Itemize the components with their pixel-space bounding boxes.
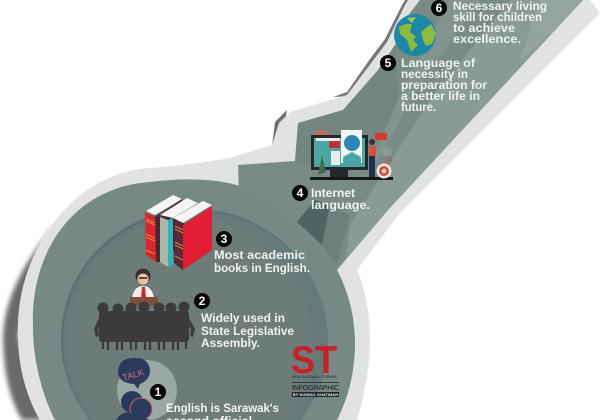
text 6: excellence. — [453, 34, 521, 46]
badge 1: 1 — [155, 385, 162, 399]
badge 2: 2 — [199, 294, 206, 308]
badge 4 — [292, 185, 308, 201]
text 2: Assembly. — [201, 336, 260, 350]
logo: ST infographic credit: INFOGRAPHIC — [292, 385, 339, 392]
text 6: skill for children — [453, 12, 542, 24]
text 2: State Legislative — [201, 324, 294, 338]
badge 6: 6 — [436, 1, 443, 15]
logo: ST infographic credit: ST — [291, 339, 337, 382]
badge 5: 5 — [385, 56, 392, 70]
step 4: computer and person icon — [310, 130, 393, 180]
text 6: Necessary living — [453, 1, 547, 13]
text 4: language. — [311, 198, 370, 212]
logo: ST infographic credit: NEW SARAWAK TRIBUNE — [292, 375, 338, 379]
badge 4: 4 — [297, 186, 304, 200]
text 6 — [453, 1, 547, 46]
step 2: audience silhouettes — [94, 302, 195, 350]
text 5: necessity in — [401, 69, 468, 81]
text 5: Language of — [401, 58, 475, 70]
step 1: talk icon: TALK — [121, 367, 145, 383]
step 5: globe icon — [394, 14, 436, 56]
text 3 — [214, 248, 310, 275]
text 5: a better life in — [401, 91, 480, 103]
text 6: to achieve — [453, 23, 515, 35]
badge 3: 3 — [221, 232, 228, 246]
text 4: Internet — [311, 186, 355, 200]
text 5: future. — [401, 102, 436, 114]
text 4 — [311, 186, 370, 212]
text 3: books in English. — [214, 261, 310, 275]
step 1: talk icon — [116, 358, 177, 420]
badge 2 — [194, 293, 210, 309]
badge 3 — [216, 231, 232, 247]
badge 5 — [380, 55, 396, 71]
badge 6 — [431, 0, 447, 16]
logo: ST infographic credit: BY KUSNUL KHATIMAH — [293, 393, 338, 397]
text 5 — [401, 58, 488, 114]
text 2 — [201, 311, 294, 350]
step 2: speaker at podium — [130, 268, 158, 306]
text 2: Widely used in — [201, 311, 285, 325]
text 1: English is Sarawak's — [166, 401, 279, 415]
text 3: Most academic — [214, 248, 305, 262]
badge 1 — [150, 384, 166, 400]
step 3: books icon — [145, 195, 212, 270]
text 5: preparation for — [401, 80, 488, 92]
